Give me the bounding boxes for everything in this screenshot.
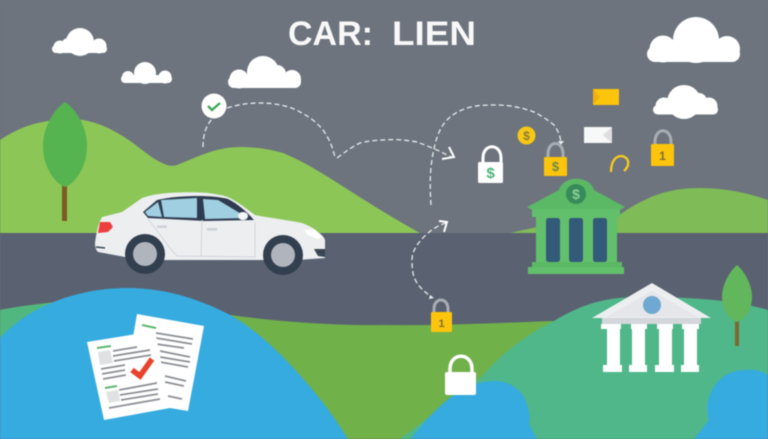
door handles [157, 226, 167, 228]
red check [132, 359, 152, 376]
car body [95, 192, 325, 260]
teal hill left [0, 302, 60, 380]
rear wheel [125, 234, 165, 274]
road [0, 233, 768, 325]
white bank [592, 283, 711, 372]
yellow lock numbered center: 1 [438, 318, 445, 330]
arrow heads [439, 147, 454, 232]
yellow lock numbered top right [651, 131, 674, 166]
title [288, 15, 476, 53]
coin: $ [523, 129, 530, 143]
white bank emblem [643, 296, 661, 314]
yellow arc [611, 156, 628, 172]
white lock bottom [445, 356, 476, 395]
white bank columns [601, 324, 699, 372]
cloud 2 [121, 62, 172, 84]
green bank roof [527, 179, 625, 210]
door lines [148, 219, 255, 257]
cloud 5 [653, 85, 718, 119]
green bank: $ [572, 186, 580, 202]
white bank roof [592, 283, 711, 318]
white envelope [584, 127, 612, 143]
left hills [0, 119, 420, 233]
cloud 3 [228, 56, 301, 88]
front wheel [263, 235, 303, 275]
green bank [527, 179, 625, 274]
lower green field [0, 302, 600, 439]
car [95, 192, 325, 275]
blue pond right [694, 370, 768, 439]
car window trim [143, 196, 254, 221]
green bank columns [536, 217, 617, 263]
yellow envelope [593, 89, 619, 105]
back page [122, 314, 204, 411]
small arrow tips [429, 141, 564, 299]
front page [87, 331, 170, 420]
yellow lock numbered center [431, 300, 452, 332]
blue pond center [411, 381, 537, 439]
teal hill right [400, 297, 768, 439]
right hill [510, 188, 768, 233]
yellow lock numbered top right: 1 [659, 149, 666, 163]
tree left [43, 102, 87, 221]
title: CAR: [288, 15, 373, 53]
cloud 4 [647, 17, 740, 63]
yellow lock with dollar: $ [552, 159, 560, 174]
side mirror [238, 212, 248, 220]
tail light [98, 222, 113, 233]
tree right [722, 265, 752, 346]
white lock with dollar [478, 147, 503, 183]
headlight [304, 230, 322, 239]
title: LIEN [392, 15, 476, 53]
coin [518, 126, 536, 144]
green bank base [532, 262, 622, 268]
documents [87, 314, 204, 420]
car windows [145, 202, 162, 217]
dashed arrows [203, 103, 561, 297]
check badge [202, 94, 226, 118]
grille [314, 249, 325, 257]
yellow lock with dollar [544, 144, 567, 176]
blue pond left [0, 288, 348, 439]
white lock with dollar: $ [486, 165, 495, 182]
green bank emblem [566, 184, 586, 204]
cloud 1 [52, 28, 107, 56]
